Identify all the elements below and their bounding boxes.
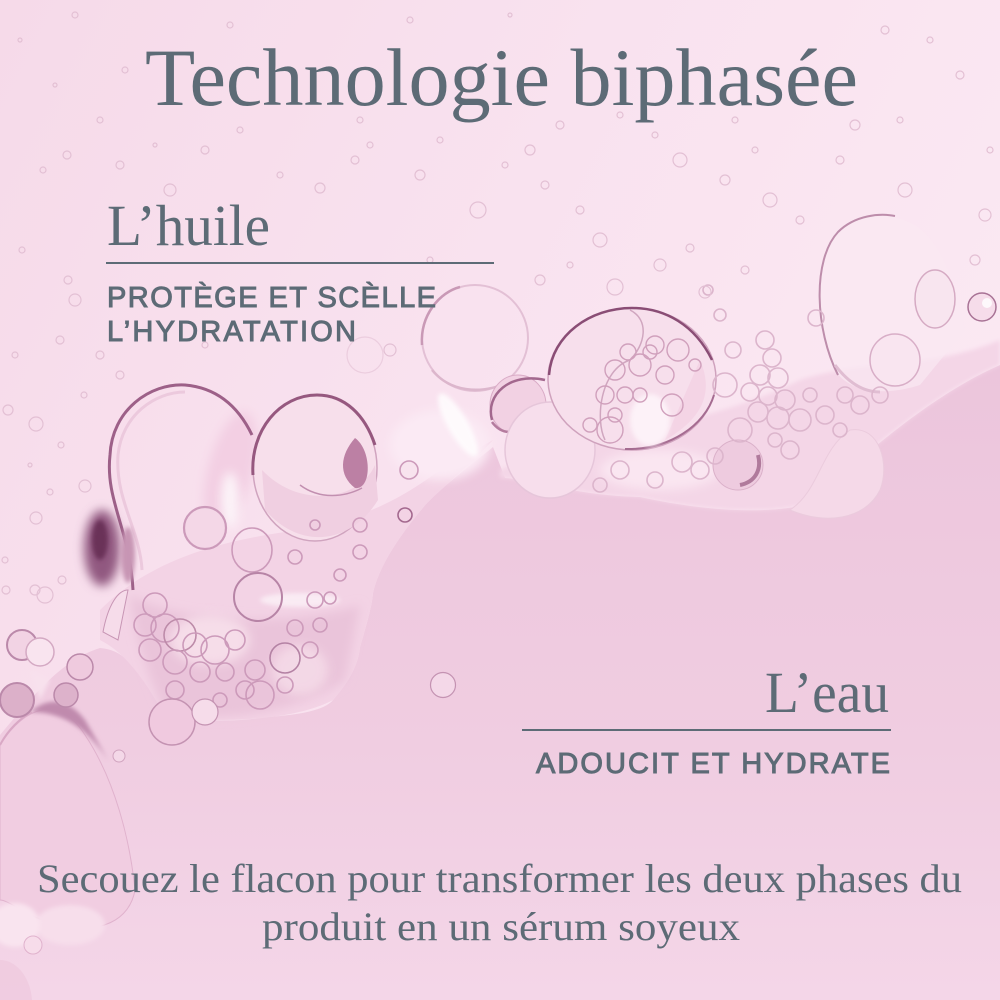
icon: upper faint bubble [422,285,528,391]
text: oil benefit: PROTÈGE ET SCÈLLE [107,281,436,314]
icon: round bubble with dark drop [253,395,378,541]
heading: L'huile: L’huile [107,193,270,258]
bubble cluster: right [593,285,888,492]
bubble cluster: left foam [134,461,418,709]
title: Technologie biphasée [145,32,858,123]
text: instructions [37,856,962,949]
icon: pale bubble under big bubble [505,402,595,498]
text: instructions: Secouez le flacon pour transformer les deux phases du [37,856,962,901]
heading: L'eau: L’eau [765,660,889,725]
icon: bottom-left water dome [0,702,135,1000]
panel: oil [106,193,494,348]
icon: bubble at lower foam edge [149,699,218,745]
icon: large right bubble [820,215,996,392]
scattered small bubbles in oil phase [2,12,993,603]
text: oil benefit [107,281,436,348]
text: oil benefit: L’HYDRATATION [107,316,356,348]
icon: small dark bubble [490,375,546,435]
icon: pale right droplet [790,430,884,518]
icon: bubble with dark edge [713,440,763,490]
icon: large keyhole bubble [84,385,252,640]
foam texture along the boundary [100,340,1000,720]
icon: tiny bubble [113,750,125,762]
text: instructions: produit en un sérum soyeux [262,904,740,949]
icon: lower-left bubbles [0,630,93,717]
panel: water [522,660,891,780]
icon: large central bubble [548,308,716,450]
text: water benefit: ADOUCIT ET HYDRATE [536,748,890,780]
background: water phase [0,365,1000,1000]
icon: lone bubble in water [430,672,456,698]
